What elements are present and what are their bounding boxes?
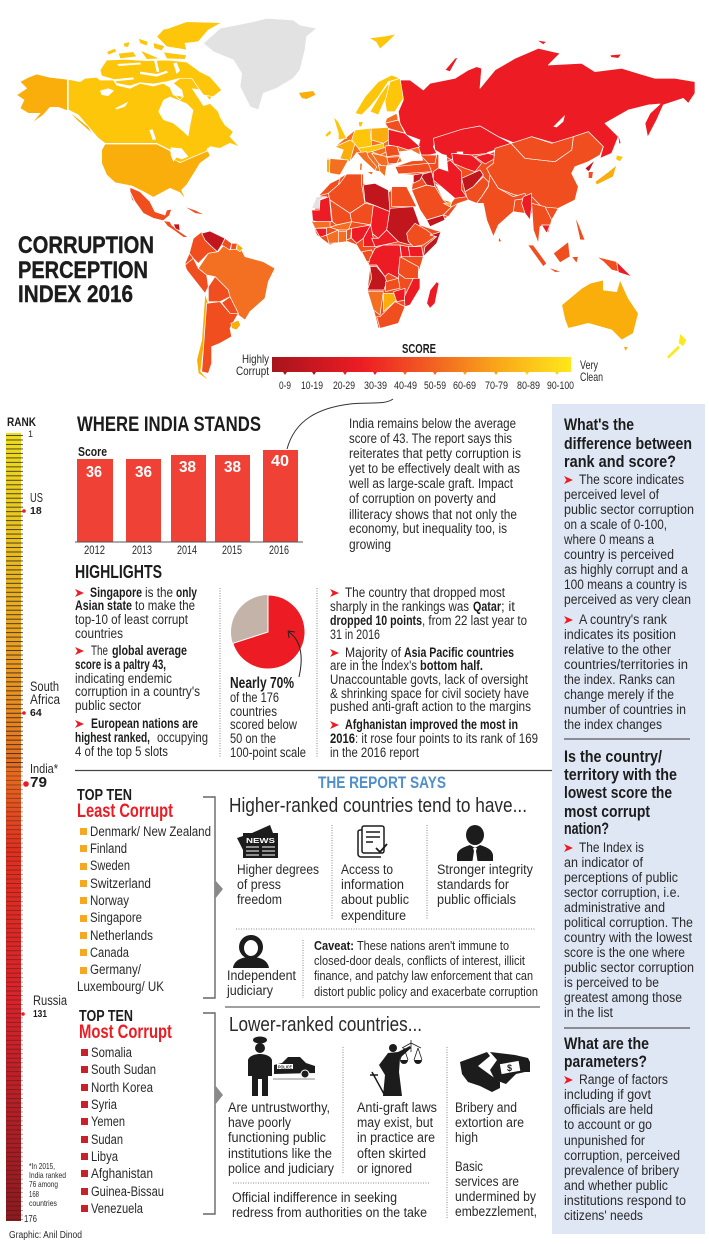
text: score explanation: on a scale of 0-100, bbox=[564, 517, 667, 532]
bar chart: where India stands: 38 bbox=[179, 459, 196, 476]
score legend: 0-9 bbox=[279, 380, 291, 392]
score legend: 50-59 bbox=[424, 380, 446, 392]
text block: highlights left: 4 of the top 5 slots bbox=[75, 744, 168, 759]
text: index explanation: is perceived to be bbox=[564, 975, 659, 990]
text: integrity standards bbox=[437, 862, 533, 907]
list: top ten least corrupt: Switzerland bbox=[90, 876, 151, 891]
list: top ten most corrupt: Most Corrupt bbox=[79, 1022, 173, 1043]
text: press freedom: freedom bbox=[237, 892, 282, 907]
text block: India commentary: of corruption on poverty and bbox=[349, 491, 496, 506]
text block: highlights right: Unaccountable govts, lack of oversight bbox=[330, 672, 528, 687]
score legend: Clean bbox=[580, 370, 603, 384]
text: rank explanation: indicates its position bbox=[564, 627, 676, 642]
text: index explanation: an indicator of bbox=[564, 855, 643, 870]
pie chart: nearly 70 percent: of the 176 bbox=[230, 690, 279, 705]
text: caveat: finance, and patchy law enforcement that can bbox=[314, 968, 533, 983]
text block: highlights right: The country that dropped most bbox=[345, 585, 505, 600]
text block: highlights right: 2016 bbox=[330, 731, 355, 746]
title: CORRUPTION bbox=[18, 232, 154, 259]
rank scale: India ranked bbox=[29, 1170, 66, 1180]
text block: highlights right: ; it bbox=[501, 599, 515, 614]
text block: highlights left: global average bbox=[112, 643, 187, 658]
heading: lowest score question: Is the country/ bbox=[564, 747, 662, 766]
list: top ten most corrupt: Sudan bbox=[91, 1132, 123, 1147]
text: untrustworthy: functioning public bbox=[228, 1130, 326, 1145]
text: score explanation: The score indicates bbox=[579, 472, 684, 487]
score legend: SCORE bbox=[402, 341, 436, 356]
heading: lowest score question: nation? bbox=[564, 819, 609, 838]
text: bribery and services: undermined by bbox=[455, 1189, 536, 1204]
text: independent judiciary bbox=[226, 968, 296, 998]
text: parameters explanation: unpunished for bbox=[564, 1133, 645, 1148]
icon: newspaper bbox=[237, 825, 278, 858]
text: independent judiciary: judiciary bbox=[226, 983, 273, 998]
text: rank explanation: change merely if the bbox=[564, 687, 674, 702]
panel: rank and score explainer bbox=[552, 404, 705, 1234]
text: parameters explanation: institutions respond to bbox=[564, 1193, 686, 1208]
text block: highlights left: is the bbox=[145, 585, 173, 600]
text: index explanation: political corruption. The bbox=[564, 915, 693, 930]
score legend: 40-49 bbox=[394, 380, 417, 392]
text block: highlights left: only bbox=[176, 585, 197, 600]
icon: newspaper: NEWS bbox=[246, 836, 275, 845]
highlights heading: HIGHLIGHTS bbox=[75, 562, 162, 582]
list: top ten least corrupt: Luxembourg/ UK bbox=[77, 979, 164, 994]
text block: highlights right: pushed anti-graft action to the margins bbox=[330, 699, 531, 714]
text: access to information: expenditure bbox=[341, 908, 406, 923]
text: rank explanation: A country's rank bbox=[579, 612, 667, 627]
text: bribery and services: embezzlement, bbox=[455, 1204, 537, 1219]
rank scale: 18 bbox=[30, 505, 42, 517]
text: parameters explanation: Range of factors bbox=[579, 1072, 668, 1087]
text: official indifference bbox=[232, 1190, 427, 1220]
heading: difference between rank and score bbox=[564, 415, 692, 471]
text: index explanation: sector corruption, i.e. bbox=[564, 885, 680, 900]
pie chart: nearly 70 percent: 50 on the bbox=[230, 731, 276, 746]
text block: highlights right: : it rose four points to its rank of 169 bbox=[355, 731, 538, 746]
text: score explanation: where 0 means a bbox=[563, 532, 654, 547]
score legend: Highly bbox=[242, 352, 269, 366]
list: top ten most corrupt: South Sudan bbox=[91, 1062, 156, 1077]
score legend bbox=[236, 341, 603, 392]
heading: higher-ranked: Higher-ranked countries tend to have... bbox=[229, 795, 527, 817]
icon: police officer and car bbox=[248, 1036, 315, 1096]
text: anti-graft laws: Anti-graft laws bbox=[357, 1100, 437, 1115]
score legend: 20-29 bbox=[333, 380, 355, 392]
title: PERCEPTION bbox=[18, 257, 148, 284]
text block: India commentary: illiteracy shows that not only the bbox=[349, 507, 517, 522]
list: top ten most corrupt: Venezuela bbox=[91, 1201, 143, 1216]
icon: lady justice bbox=[370, 1040, 422, 1096]
text block: highlights right: Afghanistan improved the most in bbox=[345, 717, 518, 732]
rank scale: 168 bbox=[29, 1189, 39, 1199]
text block: highlights left bbox=[75, 585, 208, 759]
list: top ten least corrupt bbox=[77, 787, 211, 994]
title bbox=[18, 232, 154, 308]
icon: judge bbox=[233, 935, 269, 968]
text: score explanation: perceived as very clean bbox=[564, 592, 691, 607]
text: index explanation: score is the one where bbox=[564, 945, 685, 960]
text: independent judiciary: Independent bbox=[227, 968, 296, 983]
text: index explanation: public sector corruption bbox=[564, 960, 694, 975]
text block: highlights left: Singapore bbox=[90, 585, 142, 600]
text: official indifference: Official indifference in seeking bbox=[232, 1190, 397, 1205]
text: parameters explanation: and whether public bbox=[564, 1178, 668, 1193]
text: access to information bbox=[341, 862, 409, 923]
text block: India commentary: reiterates that petty corruption is bbox=[349, 446, 521, 461]
bar chart: where India stands: Score bbox=[78, 444, 107, 459]
text block: highlights right: are in the Index's bbox=[330, 658, 417, 673]
text: bribery and services: services are bbox=[455, 1174, 519, 1189]
text: parameters explanation: citizens' needs bbox=[564, 1208, 643, 1223]
text: score explanation: public sector corruption bbox=[564, 502, 694, 517]
title: INDEX 2016 bbox=[18, 281, 133, 308]
text: parameters explanation: including if govt bbox=[564, 1087, 651, 1102]
bar chart: where India stands bbox=[75, 413, 303, 557]
bar chart: where India stands: 2014 bbox=[177, 543, 197, 557]
rank scale: *In 2015, bbox=[29, 1161, 55, 1171]
text block: highlights right bbox=[330, 585, 538, 760]
list: top ten least corrupt: Norway bbox=[90, 893, 129, 908]
icon: official in suit bbox=[457, 825, 493, 861]
rank scale: India* bbox=[30, 762, 58, 776]
text block: India commentary: well as large-scale graft. Impact bbox=[348, 476, 513, 491]
text: score explanation: 100 means a country is bbox=[564, 577, 687, 592]
text: access to information: Access to bbox=[341, 862, 393, 877]
icon: bribe handshake: $ bbox=[507, 1063, 512, 1073]
list: top ten least corrupt: Least Corrupt bbox=[77, 801, 174, 822]
list: top ten least corrupt: Singapore bbox=[90, 910, 142, 925]
heading: difference between rank and score: rank and score? bbox=[564, 452, 676, 471]
score legend: 10-19 bbox=[301, 380, 323, 392]
text: caveat: distort public policy and exacerbate corruption bbox=[314, 984, 538, 999]
text: anti-graft laws: or ignored bbox=[357, 1161, 412, 1176]
bar chart: where India stands: WHERE INDIA STANDS bbox=[77, 413, 261, 436]
text: rank explanation: number of countries in bbox=[564, 702, 686, 717]
list: top ten most corrupt: Somalia bbox=[91, 1045, 132, 1060]
score legend: 30-39 bbox=[364, 380, 387, 392]
pie chart: nearly 70 percent: scored below bbox=[230, 717, 297, 732]
list: top ten most corrupt: TOP TEN bbox=[79, 1008, 133, 1025]
text: bribery and services bbox=[455, 1100, 537, 1219]
heading: lowest score question: most corrupt bbox=[564, 802, 650, 821]
pie chart: nearly 70 percent: 100-point scale bbox=[230, 745, 306, 760]
bar chart: where India stands: 2013 bbox=[132, 543, 152, 557]
rank scale: 1 bbox=[28, 429, 33, 439]
map: North America and Greenland bbox=[17, 18, 317, 200]
text: rank explanation: relative to the other bbox=[564, 642, 671, 657]
rank scale: South bbox=[30, 679, 59, 694]
text: integrity standards: standards for bbox=[437, 877, 509, 892]
text: untrustworthy: police and judiciary bbox=[228, 1161, 334, 1176]
credit: Graphic: Anil Dinod bbox=[9, 1230, 82, 1241]
rank scale: Africa bbox=[30, 692, 60, 707]
text: parameters explanation: to account or go bbox=[564, 1117, 652, 1132]
text block: highlights right: & shrinking space for civil society have bbox=[330, 686, 529, 701]
list: top ten least corrupt: Netherlands bbox=[90, 928, 153, 943]
rank scale: 79 bbox=[30, 774, 47, 791]
text block: highlights left: European nations are bbox=[91, 716, 198, 731]
text block: highlights right: 31 in 2016 bbox=[330, 627, 380, 642]
text: untrustworthy: have poorly bbox=[228, 1115, 291, 1130]
list: top ten least corrupt: Denmark/ New Zealand bbox=[90, 824, 211, 839]
heading: lowest score question: territory with the bbox=[564, 765, 677, 784]
list: top ten most corrupt: Yemen bbox=[91, 1114, 125, 1129]
rank scale: 176 bbox=[24, 1214, 37, 1225]
score legend: 60-69 bbox=[453, 380, 476, 392]
text: index explanation: greatest among those bbox=[564, 990, 682, 1005]
score legend: 90-100 bbox=[547, 380, 574, 392]
list: top ten most corrupt: Afghanistan bbox=[91, 1166, 153, 1181]
text block: India commentary bbox=[348, 416, 521, 552]
list: top ten least corrupt: Finland bbox=[90, 841, 127, 856]
text: rank explanation: countries/territories in bbox=[564, 657, 688, 672]
icon: bribe handshake bbox=[460, 1052, 530, 1092]
rank scale: 64 bbox=[30, 707, 42, 719]
text block: highlights left: countries bbox=[75, 626, 123, 641]
pie chart: nearly 70 percent: Nearly 70% bbox=[230, 675, 294, 692]
text block: highlights left: score is a paltry 43, bbox=[75, 657, 166, 672]
text: score explanation bbox=[563, 472, 694, 607]
text: integrity standards: Stronger integrity bbox=[437, 862, 533, 877]
text: index explanation: The Index is bbox=[579, 840, 644, 855]
list: top ten least corrupt: TOP TEN bbox=[77, 787, 132, 804]
bar chart: where India stands: 38 bbox=[224, 459, 241, 476]
list: top ten most corrupt: Guinea-Bissau bbox=[91, 1184, 164, 1199]
heading: lower-ranked: Lower-ranked countries... bbox=[229, 1014, 422, 1036]
text: anti-graft laws: often skirted bbox=[357, 1146, 426, 1161]
bar chart: where India stands: 40 bbox=[271, 453, 289, 470]
text: score explanation: as highly corrupt and a bbox=[564, 562, 688, 577]
heading: the report says: THE REPORT SAYS bbox=[318, 773, 446, 792]
text block: India commentary: score of 43. The report says this bbox=[349, 431, 512, 446]
text: parameters explanation bbox=[564, 1072, 686, 1223]
text: index explanation: in the list bbox=[564, 1005, 613, 1020]
text: index explanation: administrative and bbox=[564, 900, 665, 915]
text block: India commentary: yet to be effectively dealt with as bbox=[349, 461, 520, 476]
text: parameters explanation: prevalence of bribery bbox=[564, 1163, 679, 1178]
bar chart: where India stands: 2015 bbox=[222, 543, 242, 557]
pie chart: nearly 70 percent: countries bbox=[230, 704, 277, 719]
map: Latin America and West Africa bbox=[127, 174, 441, 382]
world map bbox=[17, 18, 695, 382]
text: untrustworthy: Are untrustworthy, bbox=[228, 1100, 330, 1115]
bracket arrow: most corrupt bbox=[203, 1013, 223, 1214]
text block: highlights right: dropped 10 points bbox=[330, 613, 422, 628]
text: integrity standards: public officials bbox=[437, 892, 516, 907]
pie chart: nearly 70 percent bbox=[230, 595, 306, 760]
text: rank explanation bbox=[564, 612, 688, 732]
text: caveat bbox=[314, 938, 538, 999]
map: Europe, Asia, East Africa and Oceania bbox=[325, 34, 695, 359]
heading: lowest score question: lowest score the bbox=[564, 783, 672, 802]
text block: highlights right: Majority of bbox=[345, 645, 401, 660]
bar chart: where India stands: 36 bbox=[86, 464, 102, 481]
list: top ten most corrupt: North Korea bbox=[91, 1080, 153, 1095]
rank scale: RANK bbox=[7, 415, 36, 429]
text: press freedom bbox=[237, 862, 319, 907]
text: anti-graft laws: may exist, but bbox=[357, 1115, 433, 1130]
text: caveat: Caveat: bbox=[314, 938, 354, 953]
heading: lowest score question bbox=[564, 747, 677, 838]
text: access to information: about public bbox=[341, 892, 409, 907]
list: top ten most corrupt: Libya bbox=[91, 1149, 118, 1164]
panel: higher-ranked countries bbox=[226, 795, 538, 999]
rank scale bbox=[6, 415, 67, 1225]
list: top ten most corrupt: Syria bbox=[91, 1097, 117, 1112]
score legend: 70-79 bbox=[485, 380, 508, 392]
text: index explanation: country with the lowest bbox=[564, 930, 692, 945]
rank scale: US bbox=[30, 490, 43, 505]
text block: highlights left: Asian state bbox=[75, 598, 132, 613]
rank scale: Russia bbox=[33, 993, 67, 1008]
score legend: Very bbox=[580, 358, 598, 372]
list: top ten least corrupt: Canada bbox=[90, 945, 129, 960]
list: top ten least corrupt: Germany/ bbox=[90, 962, 141, 977]
text block: highlights right: sharply in the rankings was bbox=[330, 599, 469, 614]
text block: highlights left: corruption in a country's bbox=[75, 684, 200, 699]
text block: highlights left: to make the bbox=[135, 598, 195, 613]
bar chart: where India stands: 2016 bbox=[269, 543, 289, 557]
text block: India commentary: growing bbox=[349, 537, 391, 552]
text: anti-graft laws bbox=[357, 1100, 437, 1176]
rank scale: countries bbox=[29, 1198, 57, 1208]
text: press freedom: Higher degrees bbox=[237, 862, 319, 877]
text: parameters explanation: corruption, perceived bbox=[564, 1148, 680, 1163]
bar chart: where India stands: 36 bbox=[135, 464, 152, 481]
text block: highlights right: , from 22 last year to bbox=[422, 613, 527, 628]
text block: highlights left: The bbox=[91, 643, 108, 658]
text block: highlights left: occupying bbox=[157, 730, 208, 745]
text block: India commentary: economy, but inequality too, is bbox=[349, 521, 507, 536]
panel: lower-ranked countries bbox=[228, 1014, 537, 1220]
text: access to information: information bbox=[341, 877, 404, 892]
text: score explanation: country is perceived bbox=[564, 547, 674, 562]
text: caveat: closed-door deals, conflicts of interest, illicit bbox=[314, 953, 525, 968]
text: rank explanation: the index. Ranks can bbox=[564, 672, 675, 687]
text block: highlights left: top-10 of least corrupt bbox=[75, 612, 188, 627]
text: bribery and services: Bribery and bbox=[455, 1100, 517, 1115]
rank scale: 76 among bbox=[29, 1179, 58, 1189]
text: bribery and services: high bbox=[455, 1130, 478, 1145]
text block: highlights right: bottom half. bbox=[420, 658, 483, 673]
icon: document with tick bbox=[358, 826, 387, 857]
text block: India commentary: India remains below the average bbox=[349, 416, 516, 431]
text: bribery and services: Basic bbox=[455, 1159, 483, 1174]
list: top ten least corrupt: Sweden bbox=[90, 858, 130, 873]
score legend: 80-89 bbox=[517, 380, 540, 392]
text: anti-graft laws: in practice are bbox=[357, 1130, 435, 1145]
text: untrustworthy: institutions like the bbox=[228, 1146, 332, 1161]
heading: parameters bbox=[564, 1034, 649, 1071]
text: bribery and services: extortion are bbox=[455, 1115, 524, 1130]
list: top ten most corrupt bbox=[79, 1008, 173, 1216]
text block: highlights left: public sector bbox=[75, 698, 141, 713]
text: parameters explanation: officials are held bbox=[564, 1102, 653, 1117]
text: index explanation bbox=[564, 840, 694, 1020]
bracket arrow: least corrupt bbox=[203, 797, 223, 998]
arrow: bar to commentary bbox=[287, 399, 393, 449]
text: untrustworthy bbox=[228, 1100, 334, 1176]
text block: highlights right: Asia Pacific countries bbox=[404, 645, 514, 660]
text: official indifference: redress from authorities on the take bbox=[232, 1205, 427, 1220]
text: caveat: These nations aren't immune to bbox=[357, 938, 509, 953]
text: rank explanation: the index changes bbox=[564, 717, 662, 732]
text block: highlights left: highest ranked, bbox=[75, 730, 150, 745]
heading: parameters: What are the bbox=[564, 1034, 649, 1053]
heading: parameters: parameters? bbox=[564, 1052, 647, 1071]
text: score explanation: perceived level of bbox=[564, 487, 659, 502]
text block: highlights left: indicating endemic bbox=[75, 671, 172, 686]
text block: highlights right: in the 2016 report bbox=[330, 745, 419, 760]
text: press freedom: of press bbox=[237, 877, 281, 892]
heading: difference between rank and score: What's the bbox=[564, 415, 634, 434]
bar chart: where India stands: 2012 bbox=[84, 543, 105, 557]
text block: highlights right: Qatar bbox=[473, 599, 502, 614]
score legend: Corrupt bbox=[236, 364, 270, 378]
rank scale: 131 bbox=[33, 1008, 47, 1020]
text: index explanation: perceptions of public bbox=[564, 870, 678, 885]
icon: police officer and car: POLICE bbox=[278, 1064, 292, 1070]
